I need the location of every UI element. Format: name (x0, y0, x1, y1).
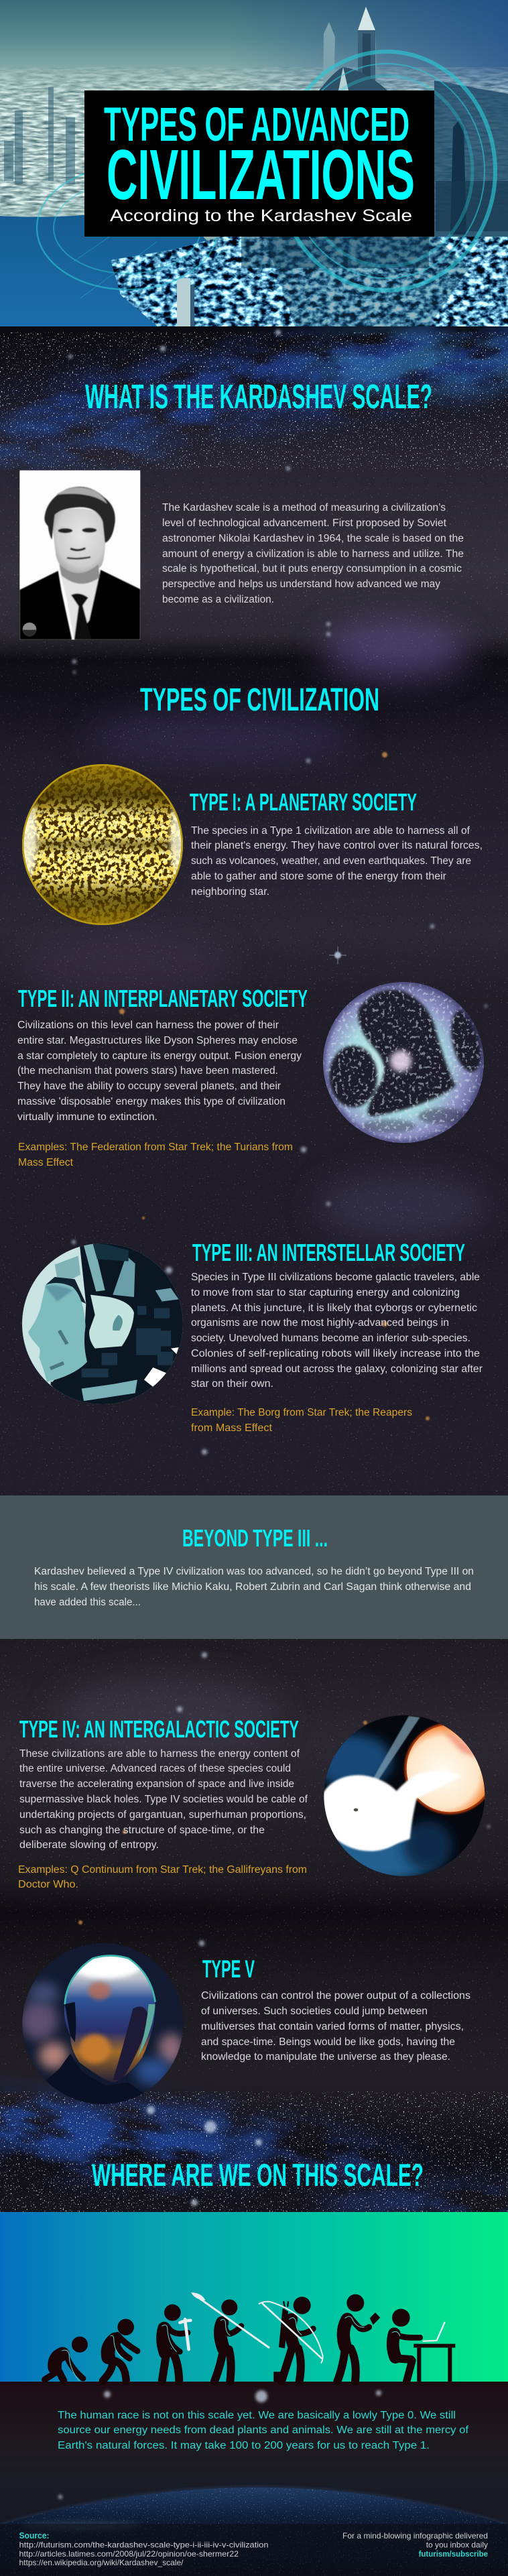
figure: at laptop (392, 2309, 455, 2382)
body: type IV: the entire universe. Advanced races of these species could (19, 1763, 291, 1774)
neck and shirt (59, 568, 102, 639)
conclusion paragraph (58, 2410, 469, 2451)
body: type IV: deliberate slowing of entropy. (19, 1839, 159, 1851)
footer: subscribe: For a mind-blowing infographic delivered (342, 2531, 488, 2540)
body: type III: star on their own. (191, 1378, 273, 1390)
body: type I (191, 825, 483, 898)
examples: type IV: Examples: Q Continuum from Star Trek; the Gallifreyans from (18, 1864, 307, 1876)
icon: black hole devouring star (324, 1715, 485, 1876)
body: type II: They have the ability to occupy several planets, and their (17, 1081, 281, 1092)
jet (373, 1716, 420, 1780)
body: type III: millions and spread out across the galaxy, colonizing star after (191, 1363, 483, 1375)
footer: subscribe: futurism/subscribe (419, 2549, 488, 2559)
examples: type III (191, 1407, 412, 1434)
examples: type III: Example: The Borg from Star Trek; the Reapers (191, 1407, 412, 1418)
footer: sources: http://futurism.com/the-kardashev-scale-type-i-ii-iii-iv-v-civilization (19, 2540, 268, 2550)
intro paragraph: perspective and helps us understand how advanced we may (162, 578, 440, 590)
body: type II: Civilizations on this level can harness the power of their (17, 1020, 279, 1031)
intro paragraph: level of technological advancement. First proposed by Soviet (162, 517, 447, 529)
details (155, 1288, 179, 1302)
earth horizon (0, 2488, 508, 2576)
panel: type V (17, 1937, 470, 2111)
accretion disc (308, 1763, 420, 1863)
body: beyond type III: have added this scale... (34, 1597, 141, 1608)
examples: type II: Mass Effect (18, 1157, 74, 1168)
footer: subscribe (342, 2531, 488, 2559)
body: type IV: such as changing the structure of space-time, or the (19, 1825, 265, 1836)
shoulders (46, 2053, 144, 2109)
panel: type IV (18, 1709, 496, 1890)
figure: with axe (162, 2305, 190, 2382)
section heading: types of civilization: TYPES OF CIVILIZATION (140, 682, 379, 718)
panel: type I (16, 764, 483, 925)
body: type IV (19, 1748, 308, 1851)
subtitle: According to the Kardashev Scale (110, 206, 412, 225)
body: type V: multiverses that contain varied forms of matter, physics, (201, 2021, 464, 2032)
face (52, 508, 105, 576)
mech strips (84, 1243, 105, 1292)
hero: right side city (434, 80, 508, 237)
body: type III (191, 1272, 483, 1390)
intro paragraph: become as a civilization. (162, 594, 274, 605)
body: type I: neighboring star. (191, 886, 269, 898)
hero: left buildings (4, 87, 75, 184)
figure: crawling (45, 2337, 88, 2381)
neck (82, 1379, 137, 1401)
hero: water (0, 201, 228, 326)
body: type V: Civilizations can control the power output of a collections (201, 1990, 470, 2002)
figure: with book (337, 2294, 380, 2382)
footer: sources: https://en.wikipedia.org/wiki/Kardashev_scale/ (19, 2558, 184, 2567)
body: type II: a star completely to capture its energy output. Fusion energy (17, 1050, 302, 1062)
icon: dyson sphere (323, 982, 487, 1143)
body: beyond type III: his scale. A few theorists like Michio Kaku, Robert Zubrin and Carl Sagan think otherwise and (34, 1581, 471, 1593)
silhouettes: modern humans (259, 2294, 455, 2382)
intro paragraph: amount of energy a civilization is able to harness and utilize. The (162, 548, 464, 560)
conclusion paragraph: Earth's natural forces. It may take 100 to 200 years for us to reach Type 1. (58, 2440, 430, 2451)
footer: sources: http://articles.latimes.com/2008/jul/22/opinion/oe-shermer22 (19, 2549, 239, 2559)
body: type II: massive 'disposable' energy makes this type of civilization (17, 1096, 285, 1107)
body: type I: such as volcanoes, weather, and even earthquakes. They are (191, 855, 471, 867)
body: beyond type III (34, 1566, 474, 1608)
intro paragraph: scale is hypothetical, but it puts energy consumption in a cosmic (162, 563, 462, 574)
body: type IV: traverse the accelerating expansion of space and live inside (19, 1778, 294, 1790)
conclusion paragraph: source our energy needs from dead plants and animals. We are still at the mercy of (58, 2425, 469, 2436)
body: type I: able to gather and store some of the energy from their (191, 871, 446, 882)
conclusion paragraph: The human race is not on this scale yet. We are basically a lowly Type 0. We still (58, 2410, 456, 2421)
body: beyond type III: Kardashev believed a Type IV civilization was too advanced, so he didn’t go beyond Type III on (34, 1566, 474, 1577)
body: type II: (the mechanism that powers stars) have been mastered. (17, 1065, 278, 1077)
tie (71, 593, 92, 639)
portrait of Nikolai Kardashev (19, 471, 140, 639)
badge (23, 623, 36, 636)
examples: type II (18, 1142, 293, 1168)
silhouettes: early humans (45, 2292, 269, 2382)
body: type IV: These civilizations are able to harness the energy content of (19, 1748, 300, 1760)
eyes, nose, mouth (58, 528, 72, 533)
body: type III: to move from star to star capturing energy and colonizing (191, 1287, 460, 1298)
examples: type IV (18, 1864, 307, 1890)
body: type III: Species in Type III civilizations become galactic travelers, able (191, 1272, 480, 1283)
body: type V: of universes. Such societies could jump between (201, 2006, 428, 2017)
body: type IV: undertaking projects of gargantuan, superhuman proportions, (19, 1809, 306, 1821)
icon: cosmic head (17, 1937, 191, 2111)
icon: sun (16, 764, 189, 925)
intro paragraph: astronomer Nikolai Kardashev in 1964, the scale is based on the (162, 533, 464, 544)
hair (44, 487, 115, 543)
examples: type II: Examples: The Federation from Star Trek; the Turians from (18, 1142, 293, 1153)
hero: lower city (111, 237, 508, 326)
intro paragraph (162, 502, 464, 605)
hero: futuristic city image (0, 0, 508, 326)
body: type III: organisms are now the most highly-advanced beings in (191, 1317, 449, 1329)
examples: type III: from Mass Effect (191, 1422, 273, 1434)
body: type II (17, 1020, 302, 1123)
heading: type IV: TYPE IV: AN INTERGALACTIC SOCIETY (19, 1715, 299, 1743)
body: type V (201, 1990, 470, 2063)
body: type I: their planet's energy. They have control over its natural forces, (191, 840, 483, 851)
panel: type II (17, 982, 487, 1168)
face (28, 1283, 87, 1382)
suit (19, 571, 72, 639)
footer: sources (19, 2531, 268, 2567)
ear (89, 1295, 134, 1349)
body: type II: virtually immune to extinction. (17, 1111, 157, 1123)
head (62, 1953, 157, 2085)
panel: type III (17, 1237, 483, 1434)
hero: towers (319, 7, 387, 90)
body: type V: and space-time. Beings would be like gods, having the (201, 2036, 455, 2048)
figure: stooped (103, 2319, 137, 2382)
figure: with spear (191, 2292, 269, 2382)
footer: subscribe: to you inbox daily (426, 2540, 488, 2550)
icon: cyborg head (22, 1243, 183, 1404)
body: type V: knowledge to manipulate the universe as they please. (201, 2051, 450, 2063)
footer: sources: Source: (19, 2531, 50, 2540)
body: type III: planets. At this juncture, it is likely that cyborgs or cybernetic (191, 1302, 477, 1314)
intro paragraph: The Kardashev scale is a method of measuring a civilization’s (162, 502, 446, 513)
evolution gradient band (0, 2212, 508, 2386)
examples: type IV: Doctor Who. (18, 1879, 78, 1890)
body: type IV: supermassive black holes. Type IV societies would be cable of (19, 1794, 308, 1805)
heading: type II: TYPE II: AN INTERPLANETARY SOCIETY (18, 985, 308, 1012)
figure: archer (259, 2296, 323, 2382)
heading: beyond type III: BEYOND TYPE III ... (182, 1524, 328, 1552)
hero: holographic rings (37, 52, 495, 298)
head plate (55, 1255, 80, 1279)
heading: type V: TYPE V (202, 1955, 255, 1983)
body: type III: Colonies of self-replicating robots will likely increase into the (191, 1348, 480, 1359)
star (404, 1723, 496, 1815)
body: type I: The species in a Type 1 civilization are able to harness all of (191, 825, 470, 837)
panel: beyond type III (0, 1495, 508, 1639)
title box (84, 90, 434, 237)
body: type II: entire star. Megastructures like Dyson Spheres may enclose (17, 1035, 298, 1046)
body: type III: society. Unevolved humans become an inferior sub-species. (191, 1333, 470, 1344)
